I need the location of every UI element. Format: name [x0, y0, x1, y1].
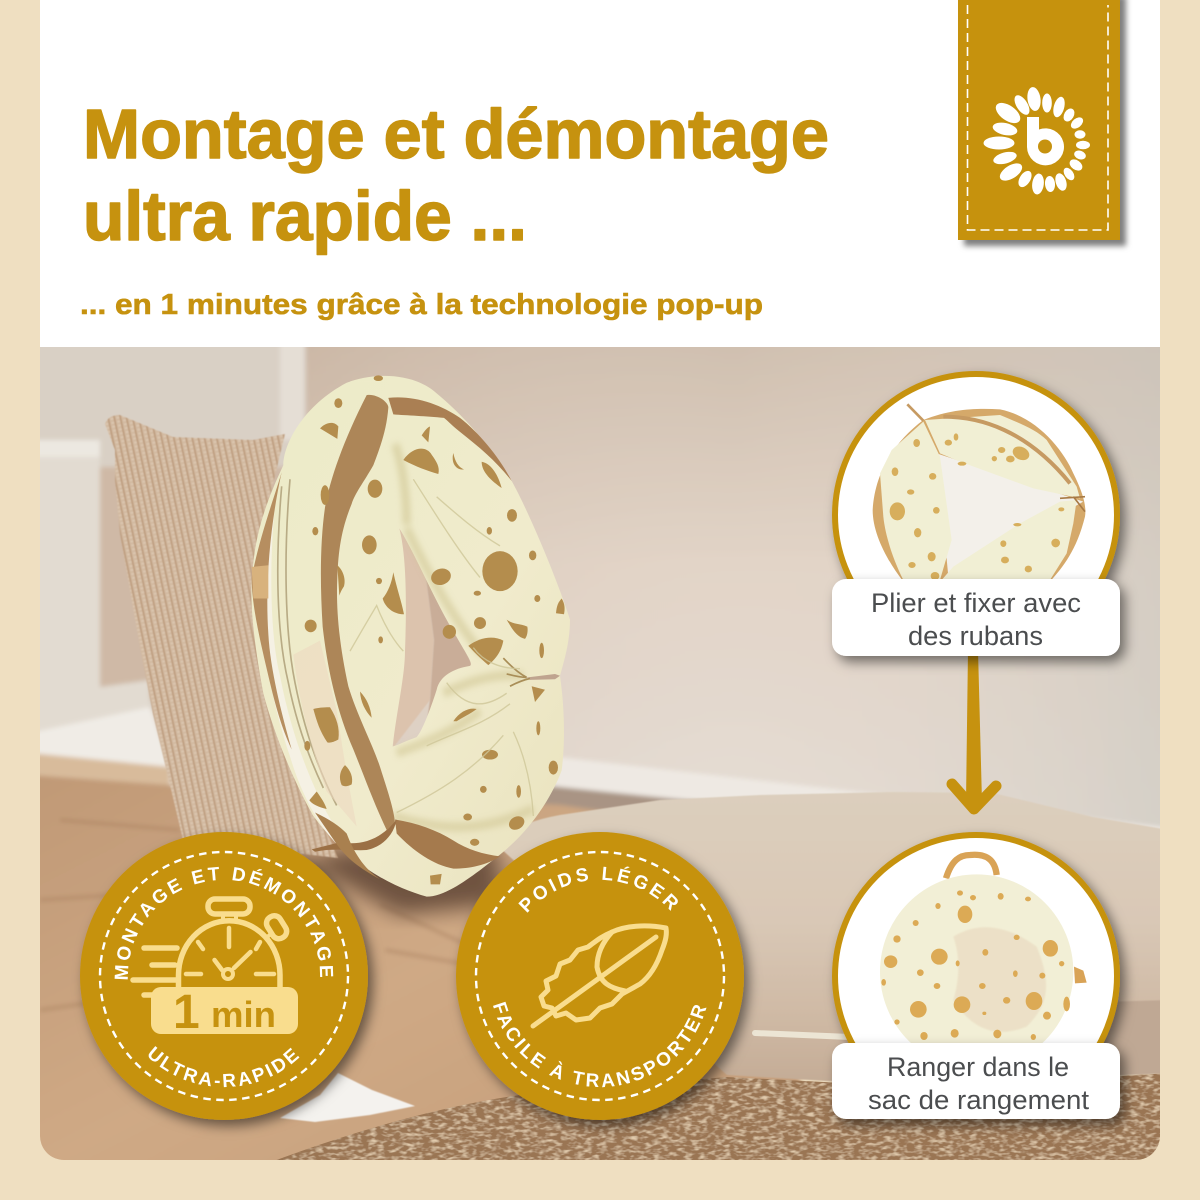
- left pleats: [267, 516, 336, 844]
- icon: feather: [533, 926, 666, 1026]
- illustration: folded tunnel: [873, 404, 1085, 582]
- jute rug: [276, 1074, 1160, 1160]
- step 1 label: des rubans: [908, 621, 1043, 651]
- icon: stopwatch: [133, 899, 298, 1034]
- step 2 label: [832, 1043, 1120, 1119]
- step 2 circle: [829, 830, 1133, 1048]
- 1 min label: min: [211, 994, 276, 1035]
- knit cushion: [105, 415, 338, 858]
- photo background: walls and floor: [30, 340, 1170, 1170]
- badge: poids léger: [453, 830, 757, 1134]
- illustration: storage bag: [880, 852, 1087, 1043]
- step 1 circle: [828, 369, 1133, 586]
- 1 min box: [151, 987, 298, 1034]
- badge: 1 minute: [77, 830, 381, 1134]
- brown band: left edge: [252, 472, 292, 749]
- cushion seen through the tunnel: [392, 525, 434, 748]
- white header panel: [40, 0, 1160, 348]
- fabric shading: [393, 444, 533, 827]
- fabric dots: [304, 375, 565, 884]
- brown band: main stripe: [321, 395, 395, 830]
- flat linen cushion: [500, 792, 1170, 1082]
- room photo: [30, 340, 1170, 1170]
- logo tag: [958, 0, 1120, 240]
- step 2 label: sac de rangement: [868, 1085, 1090, 1115]
- step 1 label: [832, 579, 1120, 656]
- title: [83, 95, 829, 255]
- step 1 label: Plier et fixer avec: [871, 588, 1081, 618]
- arrow between steps: [952, 650, 996, 809]
- title: ultra rapide ...: [83, 177, 527, 255]
- white fringe: [280, 1073, 415, 1122]
- gather knot: [527, 674, 560, 680]
- 1 min label: 1: [173, 986, 200, 1039]
- badge text: ultra-rapide: ULTRA-RAPIDE: [148, 1046, 300, 1088]
- fabric folds: [350, 479, 533, 816]
- badge text: montage et démontage: MONTAGE ET DÉMONTAGE: [114, 866, 334, 980]
- brown band: top right: [388, 397, 512, 481]
- badge text: facile à transporter: FACILE À TRANSPORTER: [493, 1002, 706, 1088]
- 1 min label: [173, 986, 276, 1039]
- badge text: poids léger: POIDS LÉGER: [518, 866, 678, 913]
- title: Montage et démontage: [83, 95, 829, 173]
- folded pop-up tunnel: [251, 375, 570, 897]
- brown band: bottom: [395, 820, 500, 869]
- tunnel fabric ring: [251, 376, 570, 897]
- step 2 label: Ranger dans le: [887, 1052, 1069, 1082]
- wall seen through the tunnel: [426, 580, 471, 715]
- subtitle: ... en 1 minutes grâce à la technologie pop-up: [80, 289, 763, 321]
- icon: sunflower logo: [984, 86, 1090, 195]
